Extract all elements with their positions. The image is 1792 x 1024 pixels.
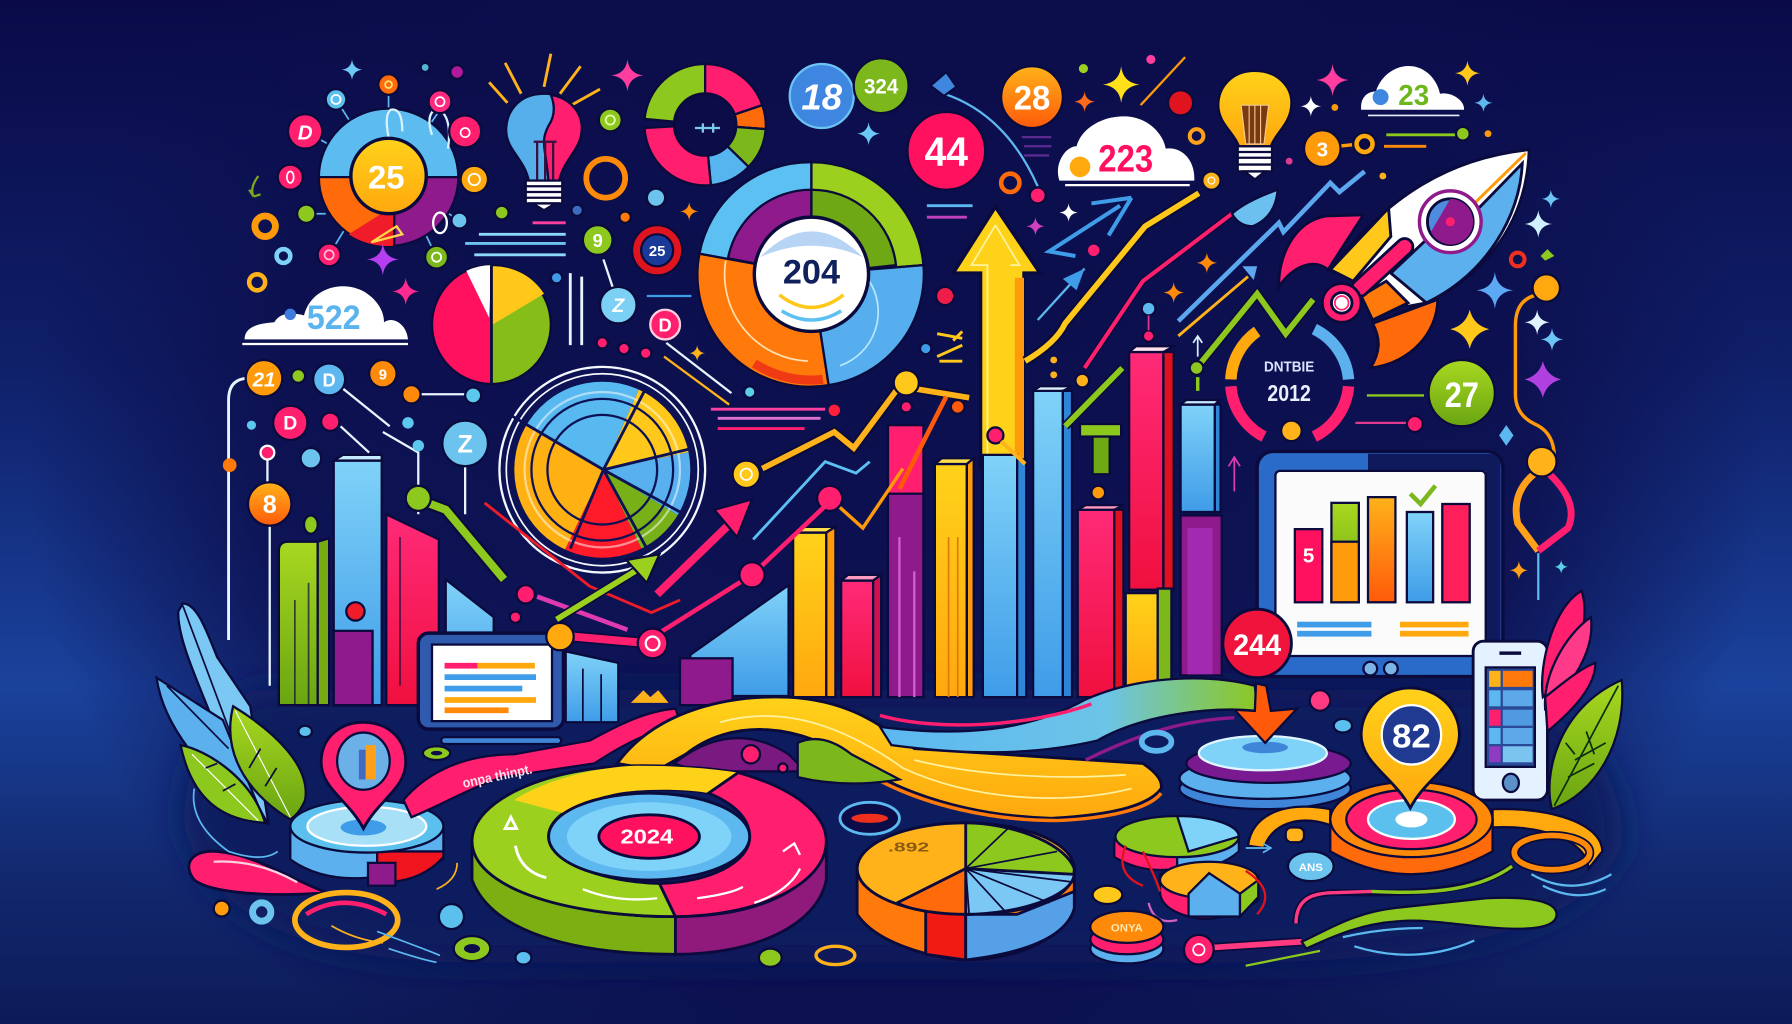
pink ribbon with text [403, 709, 681, 817]
tall bars right [983, 346, 1222, 697]
cloud 522 [242, 286, 408, 344]
badge 324: 324 [864, 74, 898, 99]
node 9 and badge 25: D [659, 314, 672, 335]
feather leaves left [157, 603, 269, 825]
small blue button and dots: ANS [1299, 862, 1323, 874]
top left wheel infographic: 25 [368, 160, 405, 196]
blue outline arrows [920, 198, 1155, 387]
leaves right [1542, 591, 1622, 809]
middle bar chart [631, 425, 923, 705]
badge 28 [1001, 66, 1063, 128]
3D pie chart bottom [857, 823, 1074, 960]
small blue button and dots [1093, 827, 1334, 904]
curved blue arrow top [927, 72, 1051, 217]
blue thin trend line [753, 462, 870, 539]
rocket [1279, 150, 1529, 368]
big 2024 ring chart: 2024 [621, 825, 674, 848]
orange light bulb [1218, 71, 1291, 179]
pink blob lower left [189, 851, 327, 894]
green leaves left [181, 706, 306, 823]
rising ribbons [1025, 171, 1365, 368]
cloud 223: 223 [1098, 137, 1153, 179]
small 3D pies [1114, 816, 1265, 921]
satellite nodes around wheel: D [298, 121, 313, 144]
top left wheel infographic [305, 94, 474, 257]
ribbon wave [617, 697, 1161, 821]
badge 44 [907, 112, 985, 190]
sparkle stars top left [342, 59, 880, 361]
coin stack: ONYA [1111, 922, 1143, 934]
small top right dots [1079, 55, 1554, 266]
node 9 and badge 25 [551, 225, 755, 405]
left bar chart [279, 455, 494, 709]
pink green curve [1246, 866, 1611, 966]
green T marker and rising line [1065, 368, 1122, 499]
left network nodes: D [323, 369, 336, 390]
green spoon line [1184, 898, 1557, 965]
light bulb left [489, 54, 600, 210]
icon: orange map pin 82 [1361, 688, 1459, 808]
big 2024 ring chart [472, 766, 826, 954]
cloud 522: 522 [307, 299, 361, 337]
tablet with bar chart [1257, 451, 1503, 677]
badge 44: 44 [925, 129, 968, 175]
pink ribbon with text: onpa thinpt. [461, 761, 534, 791]
icon: pink map pin [321, 722, 406, 829]
text lines beside bulb [465, 223, 582, 345]
badge 27 and connector lines [1355, 360, 1495, 432]
orange trend line [733, 370, 969, 488]
left network nodes: 8 [263, 491, 277, 519]
gold ring and small items lower left [194, 726, 855, 967]
left network nodes [223, 360, 488, 686]
icon: green leaf right [1549, 680, 1622, 809]
small monitor left [418, 633, 618, 744]
left platform with pin [290, 722, 443, 886]
gauge 2012: 2012 [1267, 380, 1311, 406]
badge 18: 18 [801, 77, 843, 118]
misc top dots and ring [495, 109, 665, 223]
left network nodes: 21 [252, 368, 275, 391]
green arrow and pink line nodes [546, 499, 829, 658]
gauge 2012 [1231, 329, 1349, 441]
tablet bars [1295, 486, 1470, 602]
text lines below donut [711, 405, 840, 429]
radial target pie chart [491, 366, 709, 573]
cloud 223 [1058, 116, 1194, 185]
red blue ellipse [840, 802, 899, 834]
badge 324 [854, 58, 909, 113]
tablet text lines [1297, 622, 1469, 637]
cloud 23 [1361, 66, 1464, 115]
badge 27 and connector lines: 27 [1445, 375, 1479, 415]
phone [1473, 641, 1547, 800]
red line and nodes over bars [817, 397, 1025, 528]
big donut chart 204 [697, 162, 924, 387]
node 9 and badge 25: 9 [593, 230, 603, 251]
orange platform with pin [1248, 688, 1602, 874]
tablet bars: 5 [1303, 544, 1314, 567]
icon: orange map pin 82: 82 [1392, 718, 1431, 755]
node 3 connector [1304, 127, 1491, 167]
big yellow growth arrow [953, 207, 1040, 469]
badge 18 [790, 64, 854, 128]
node 9 and badge 25: 25 [649, 244, 665, 260]
left network nodes: D [283, 413, 297, 435]
coin stack [1090, 911, 1163, 963]
pie chart pink green yellow [432, 265, 551, 384]
left network nodes: Z [457, 431, 473, 459]
blue green wave [880, 678, 1257, 760]
3D pie chart bottom: .892 [888, 840, 929, 854]
cloud 23: 23 [1398, 80, 1429, 112]
red orange down arrow and badge 244: 244 [1233, 629, 1282, 662]
red orange down arrow and badge 244 [1223, 609, 1297, 743]
satellite nodes around wheel [249, 63, 488, 290]
green and red trend lines [406, 486, 680, 630]
badge 28: 28 [1014, 80, 1050, 118]
left network nodes: 9 [379, 367, 387, 383]
right squiggle with loop [1229, 274, 1571, 600]
center bar chart [935, 458, 974, 697]
node 3 connector: 3 [1317, 139, 1328, 162]
small donut chart top [645, 64, 766, 185]
stacked disc right [1142, 690, 1352, 809]
node 9 and badge 25: Z [611, 295, 625, 317]
big donut chart 204: 204 [783, 253, 840, 291]
gauge 2012: DNTBIE [1264, 359, 1314, 375]
sparkles top right [1026, 61, 1568, 579]
green zigzag line [1190, 294, 1313, 391]
